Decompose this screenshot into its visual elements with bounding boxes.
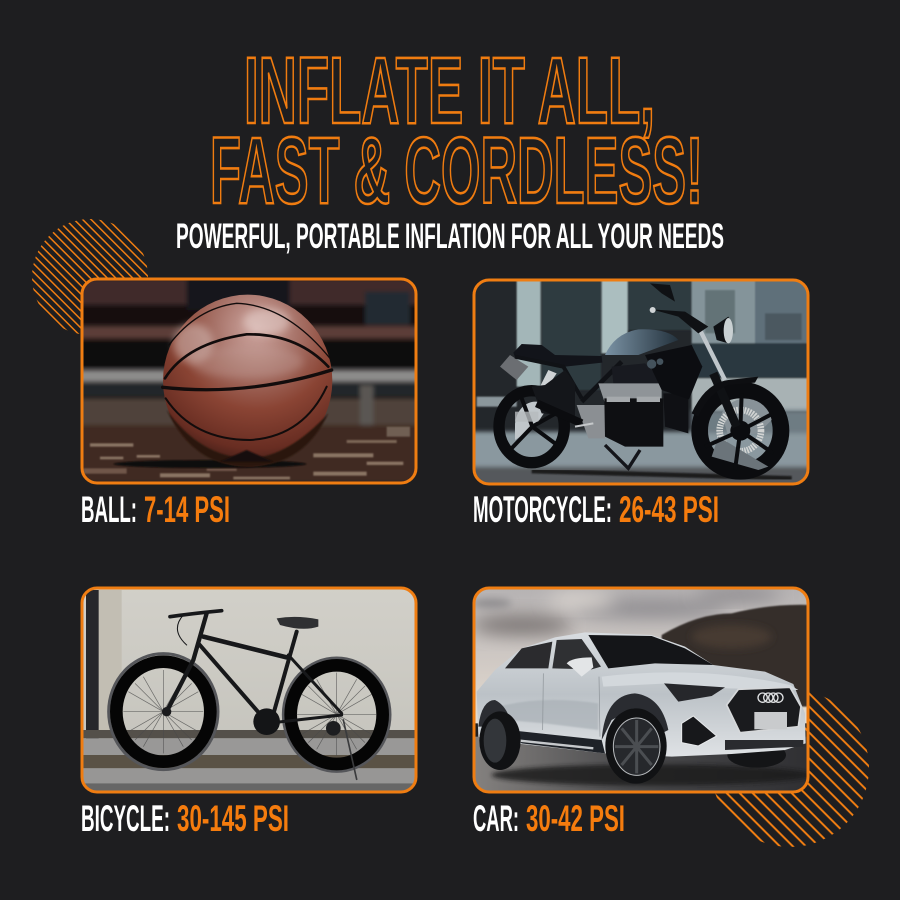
bicycle label: 30-145 PSI	[177, 798, 289, 839]
car label: CAR:	[473, 798, 519, 839]
bicycle label: BICYCLE:	[81, 798, 170, 839]
panel: ball	[80, 278, 418, 522]
wheel arches and wheels	[602, 693, 668, 740]
seat and rear frame	[513, 344, 602, 367]
car label	[473, 798, 625, 839]
motorcycle label: 26-43 PSI	[619, 489, 719, 530]
far front wheel	[727, 750, 786, 768]
front details	[727, 687, 801, 733]
panel: motorcycle	[472, 277, 812, 530]
car photo illustration	[472, 583, 812, 797]
car body	[477, 632, 806, 757]
engine	[612, 364, 658, 384]
ball label: 7-14 PSI	[144, 489, 230, 530]
panel: car	[472, 583, 812, 839]
front fork and handlebars	[699, 330, 727, 381]
car label: 30-42 PSI	[526, 798, 625, 839]
ball label: BALL:	[81, 489, 137, 530]
wheels	[499, 390, 781, 471]
bicycle card border	[82, 588, 416, 792]
decorative hatched circle: top left	[32, 219, 148, 335]
wheels	[109, 654, 390, 771]
ball photo illustration	[84, 280, 414, 482]
bicycle photo illustration	[84, 590, 414, 790]
motorcycle label: MOTORCYCLE:	[473, 489, 612, 530]
ball card border	[82, 279, 416, 483]
frame	[167, 611, 357, 779]
title	[210, 38, 703, 224]
motorcycle photo illustration	[472, 277, 812, 487]
decorative hatched circle: bottom right	[711, 689, 869, 847]
car card border	[474, 588, 808, 792]
panel: bicycle	[77, 583, 423, 839]
motorcycle card border	[474, 280, 808, 484]
windows	[588, 635, 713, 668]
